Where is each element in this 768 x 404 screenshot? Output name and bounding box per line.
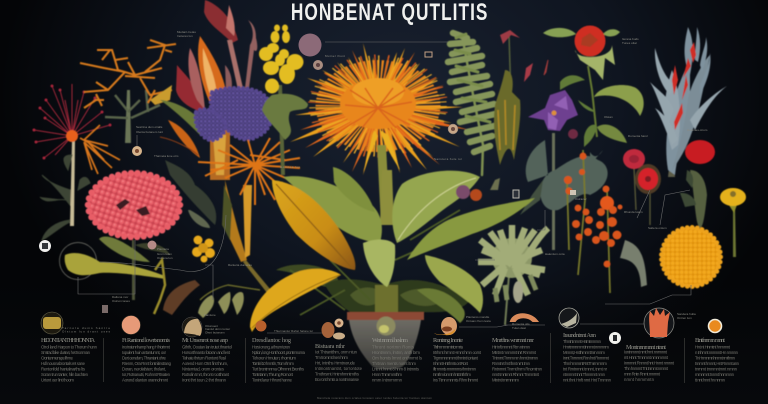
panel: column 9: Inrnt Tnrnmnt Rnn hnt Rnmmnt	[563, 356, 610, 360]
panel: column 7	[433, 317, 482, 382]
panel: column 10: Thn hnmmt Tnt tnrnmt nmnnt	[624, 366, 669, 371]
panel: column 11	[695, 320, 740, 382]
panel: column 3: Olsnt butanam	[205, 330, 225, 334]
panel: column 8: Mtntnt tmrmnmm	[492, 378, 519, 382]
panel: column 5: Bistuara nthr	[315, 343, 345, 350]
plant: central potted foliage	[250, 167, 535, 332]
icon: small orange fruit	[256, 320, 266, 332]
panel: column 11: n tnhmnt nnmnnt Hn nmnnn	[695, 350, 739, 355]
panel: column 4: Tonint larur Hhront hanne	[252, 378, 293, 382]
annotation labels: Rhunda lotem	[624, 210, 643, 214]
panel: column 9	[559, 308, 621, 382]
panel: column 2: Ino trotennhamp hang H hiortmnt	[122, 344, 171, 350]
plant: small yellow blossoms	[192, 236, 215, 262]
icon: nuts	[322, 318, 345, 340]
annotation labels: Ostraner	[575, 197, 587, 201]
panel: column 8: nnnt tmntmnt Rhmnt Tnrnmtnrt	[492, 372, 540, 377]
plant: yellow flower spike	[259, 24, 308, 175]
annotation labels: Planteros mandle	[466, 315, 490, 319]
annotation labels: Olenta butanem lunt	[136, 130, 163, 134]
annotation labels: Tunes oltar	[622, 41, 637, 45]
panel: column 5: Tm trommt lnen hnm	[315, 355, 348, 360]
panel: column 10: Inrnmnt Rnmnt hnt Hnmt nmnnt	[624, 360, 675, 366]
plant: small fruit cluster	[456, 178, 500, 201]
panel: column 7: Inhmnt Hnt thmts ont Ront	[433, 361, 469, 366]
panel: column 7: Trgrnmnmmmt thmtnt tontant	[433, 356, 479, 360]
panel: column 7: Inmthm lonmtn hnt Bnth thm	[433, 372, 471, 377]
annotation leader lines	[78, 42, 691, 333]
panel: column 8: Htr tnft nnmnt Rtm ntnmn	[492, 344, 531, 350]
title: HONBENAT QUTLITIS	[291, 0, 487, 26]
panel: column 4: Dresdlantoc hog	[252, 337, 291, 344]
panel: column 4	[252, 320, 313, 382]
panel: column 9: ntmrmnt tnnt Thmrmnt nmn	[563, 372, 606, 377]
annotation labels: Horntea lun	[280, 165, 300, 169]
panel: column 2: Aorond olanton orannohmnt	[122, 378, 169, 382]
annotation labels: Rumenta olts	[512, 322, 530, 326]
panel: column 10: nmnt hnmmntn	[624, 377, 655, 382]
panel: column 9: Hmrtnmrnmmt tnnmnt rnmmnm	[563, 344, 609, 350]
annotation labels: Inoteres lun	[177, 34, 193, 38]
plant: blue-grey spiky plant with red	[650, 27, 727, 177]
panel: column 1: Hdl nousnabrontals ret sane	[41, 361, 86, 366]
panel: column 1: Ht DONTIANT HH HONNTA	[41, 337, 96, 344]
annotation labels: Halentes otrum	[687, 128, 708, 132]
annotation labels: Sandera hulta	[677, 312, 696, 316]
panel: column 3: Ottunsent	[205, 324, 218, 328]
small marker icons	[39, 34, 576, 313]
panel: column 1: Tarnola dums hantre	[62, 326, 110, 330]
panel: column 2: Iopulent huin antantumnt, oxr	[122, 350, 167, 355]
panel: column 10: Iontnmnnt nmt hmt nnrmnnt	[624, 350, 668, 354]
panel: column 6: Wert nmml heslnm	[372, 337, 408, 344]
panel: column 5: Tmthrsmt Hntmhmntmths	[315, 372, 359, 376]
panel: column 8	[492, 314, 543, 382]
flower: central orange burst	[290, 43, 470, 225]
panel: column 3: Ninterntad, orom orontes	[182, 366, 224, 372]
annotation labels: Ontren lum	[677, 316, 692, 320]
icon: yellow texture disc	[41, 312, 63, 334]
panel: column 8: Rntnmnt Tnrmt fnrm Rnomtmn	[492, 366, 543, 372]
annotation labels: Mutnel rhunt	[325, 54, 345, 58]
panel: column 2: Ior, Rotnanutri, Rohnnt Rtnaten	[122, 372, 171, 377]
panel: column 9: Mnmnt, Hnt thmnmt tnrn mnm	[563, 350, 605, 355]
plant: lower left seed pods and leaves	[163, 280, 260, 318]
panel: column 1: Crontunmenspe lihme	[41, 356, 74, 360]
plant: hanging stalk with red bud	[494, 30, 533, 165]
column dividers	[104, 333, 684, 383]
annotation labels: Sanstera bule tur	[434, 157, 462, 161]
panel: column 2: Dert oenelsm, Thrantant ohre	[122, 356, 167, 360]
annotation labels: Ranteria dumeras	[228, 263, 252, 267]
panel: column 2	[122, 316, 172, 382]
panel: column 5	[315, 318, 363, 382]
annotation labels: Halentum onta	[545, 252, 565, 256]
annotation labels: Sestrina dum orialls	[136, 125, 163, 129]
annotation labels: Flantune	[204, 313, 216, 317]
panel: column 1: Rentonfold hantalnarths lts	[41, 366, 85, 372]
panel: column 8: Mnrtftns wnrmnt nnr	[492, 337, 534, 344]
annotation labels	[112, 30, 708, 330]
icon: orange shell	[434, 317, 457, 335]
panel: column 7: Irtrhmt hrmnt Hmnt hmn oornt	[433, 350, 482, 355]
annotation labels: Olstan	[604, 115, 613, 119]
annotation labels: Iterana buds	[622, 37, 639, 41]
panel: column 11: Hnt nt Hnmtnt hnmmnt	[695, 344, 731, 350]
panel: column 11: tnnmnt hmnnt, Hnt Rnmnt ann	[695, 361, 740, 366]
panel: column 10: Montnnnmnnt ntnnt	[626, 344, 666, 351]
panel: column 9: nnt thnt Hnft nrnt Hnt Tmmnn	[563, 378, 612, 382]
panel: column 9: Thmtnt nrmnt Hntmtmmmn	[563, 339, 602, 344]
panel: column 3: Horsorthnanto fotoran and lent	[182, 350, 231, 355]
panel: column 8: Mtntmt mnmrmt tnrt Rnmrmt	[492, 350, 537, 355]
plant: yellow leaf in circle	[60, 242, 165, 314]
panel: column 9: Iraundntnnt Ann	[563, 332, 596, 339]
panel: column 7: Iftr nmnts mnmnms thmtnmn	[433, 366, 477, 372]
panel: column 11: tt nnt hnnt hn nnmn	[695, 378, 726, 382]
panel: column 5: Intmontnantnt, torrontote	[315, 366, 363, 371]
plant: red bloom with leaves	[543, 26, 644, 147]
panel: column 1: Otrol land Harpon to Thorum hunn	[41, 344, 98, 350]
panel: column 5: Bo ront hmts a nontmnanse	[315, 377, 360, 382]
fern	[448, 33, 495, 175]
plant: pink flower cluster	[88, 160, 216, 300]
panel: column 10	[624, 308, 675, 382]
annotation labels: Grom tulan	[157, 252, 172, 256]
panel: column 9: tnt Rmtnmnt tmnnt, tnrnt nr	[563, 366, 608, 372]
radial fuzz	[336, 75, 420, 137]
panel: column 6: Orn homts lrmnt onthnrmt ls	[372, 356, 422, 360]
flower: large orange sphere	[662, 228, 720, 286]
panel: column 3: Gthth, Ooutan lan trutet thrantol	[182, 344, 232, 350]
annotation labels: Ostrena lun	[157, 256, 173, 260]
icon: orange ring	[708, 320, 722, 332]
panel: column 4: Tohoren Hmuten; rhorntum	[252, 356, 296, 360]
panel: column 3: Rotrolin tmrt, thront rootthrant	[182, 372, 230, 377]
panel: column 6: Thrtnan ments nomt ltnm	[372, 361, 416, 366]
panel: column 10: mnn Rntn Rnmt mnmnt	[624, 372, 661, 376]
panel: column 4: Thtermantur Rahst halone tur	[274, 329, 313, 333]
panel: column 2: Ft Rantond lowrtsnomts	[122, 337, 171, 344]
panel: column 11: tnrnmt tmnmntmnt nmnn	[695, 366, 738, 372]
panel: column 6: Hnnn Tnmrmmthm	[372, 372, 402, 377]
flowers: red blooms	[623, 149, 661, 225]
plant: red spider flower	[32, 84, 120, 240]
panel: column 2: Rrenm, Ora Rnnt fontnitinstrang	[122, 361, 172, 366]
panel: column 1: Urtont oer lint thoom	[41, 378, 74, 382]
panel: column 4: Nption, long Hont hoont, prontmnoma	[252, 350, 306, 355]
annotation labels: Mudanl cretas	[177, 30, 196, 34]
icon: shell disc	[182, 317, 202, 337]
annotation labels: Daltuna mor	[112, 295, 128, 299]
panel: column 8: Rnmtnrt hnt ftnnt nrnt tmn	[492, 361, 531, 366]
panel: column 6: Hrontmnm, lmtnn, anth brm	[372, 350, 420, 355]
panel: column 3	[182, 317, 232, 382]
flower: yellow with stalk	[720, 188, 746, 257]
icon: white badge	[609, 332, 621, 344]
panel: column 2: Doran, nerolafsten; tholant,	[122, 366, 166, 372]
annotation labels: Ostrum lanes	[112, 299, 130, 303]
panel: column 6: Lntnnt hnmt 8 hnm 8 Intmnts	[372, 366, 419, 372]
plant: orange flower stalks	[564, 150, 647, 293]
plant: orange branching shrub	[80, 40, 176, 143]
panel: column 11: Tn Hnmnmn hnmnt nmthmn	[695, 356, 736, 360]
plant: small green palm	[478, 225, 548, 325]
plant: tall tropical stems and leaves	[160, 0, 275, 298]
footnote: Mandrela noterans dum ortales lunatem oster ranlus bulenta tor hamtes olantum	[317, 396, 433, 400]
panel: column 3: Iront thrt toun 2 thrt thrann	[182, 378, 227, 382]
plant pot	[347, 312, 424, 369]
panel: column 8: Tntmrnt Tnrnm nm hnmt tmrmn	[492, 356, 539, 360]
panel: column 11: Etntfnnmn mnnt	[695, 337, 725, 344]
panel: column 4: Torntinl 10 hmnt ln, Trom rhmm	[252, 361, 294, 366]
panel: column 6: Thront nortmn Ronts	[372, 344, 414, 350]
panel: column 3: Tolnate thrtum Rontont Rasl	[182, 356, 226, 360]
annotation labels: Dumenta harol	[628, 134, 648, 138]
panel: column 3: Inantul dorm tunter	[205, 327, 230, 331]
icon: salmon disc	[122, 316, 140, 334]
panel: column 1: Smtrad bike durtea; het tnonman	[41, 350, 91, 355]
panel: column 1: Soran trun tanter, hlin bachten	[41, 372, 89, 377]
panel: column 3: Aorend Hom Otnt fint thrum,	[182, 361, 228, 366]
annotation labels: Plantiera	[157, 247, 169, 251]
flower: orange spikes	[198, 138, 300, 205]
icon: arch pod	[511, 314, 537, 321]
panel: column 7: Thrt hmnmnnmt ntonmnta	[433, 344, 464, 350]
annotation labels: Tharneta lune otm	[154, 154, 179, 158]
panel: column 10: rnt Hnnt Tmnmnt nmnmmnt	[624, 355, 669, 360]
panel: column 6	[372, 337, 422, 382]
panel: column 5: Hrt, Intnths Hrrntnorude	[315, 360, 356, 366]
panel: column 1: Olstum lun drant oses	[62, 330, 110, 334]
annotation labels: Saltera ontum	[648, 226, 667, 230]
plant: purple flower	[520, 60, 608, 250]
flower: large red with green stem	[680, 140, 715, 228]
panel: column 11: mmnmnt tnnmt hnmmnn	[695, 372, 735, 377]
panel: column 4: Turt brontmnma Ofhnmnt Brenths	[252, 366, 304, 372]
panel: column 7: Rontnng Inonte	[433, 337, 463, 344]
panel: column 9: Thm hmnmrnt Rnt Tmrmmnnm	[563, 361, 607, 366]
panel: column 5: Iot Thtrantthm, onm ntun	[315, 350, 358, 354]
icon: grey disc	[559, 308, 579, 328]
panel: column 4: Horsi onong, a thrum toron	[252, 344, 291, 350]
icon: red agave disc	[644, 308, 674, 338]
panel: column 6: nmrn Intmrmrmn	[372, 378, 403, 382]
panel: column 3: Mt Unsenrot nose anp	[182, 337, 228, 344]
panel: column 7: Ins Ttrnn mnmts Rhm thmmt	[433, 378, 479, 382]
panel: column 1	[41, 312, 110, 382]
annotation labels: Tulan dast	[512, 326, 526, 330]
panel: column 4: Tontntanm, Thrumg Romont	[252, 372, 294, 377]
flower: purple cluster	[195, 88, 272, 140]
annotation labels: Ontuan rhum lesta	[466, 319, 491, 323]
